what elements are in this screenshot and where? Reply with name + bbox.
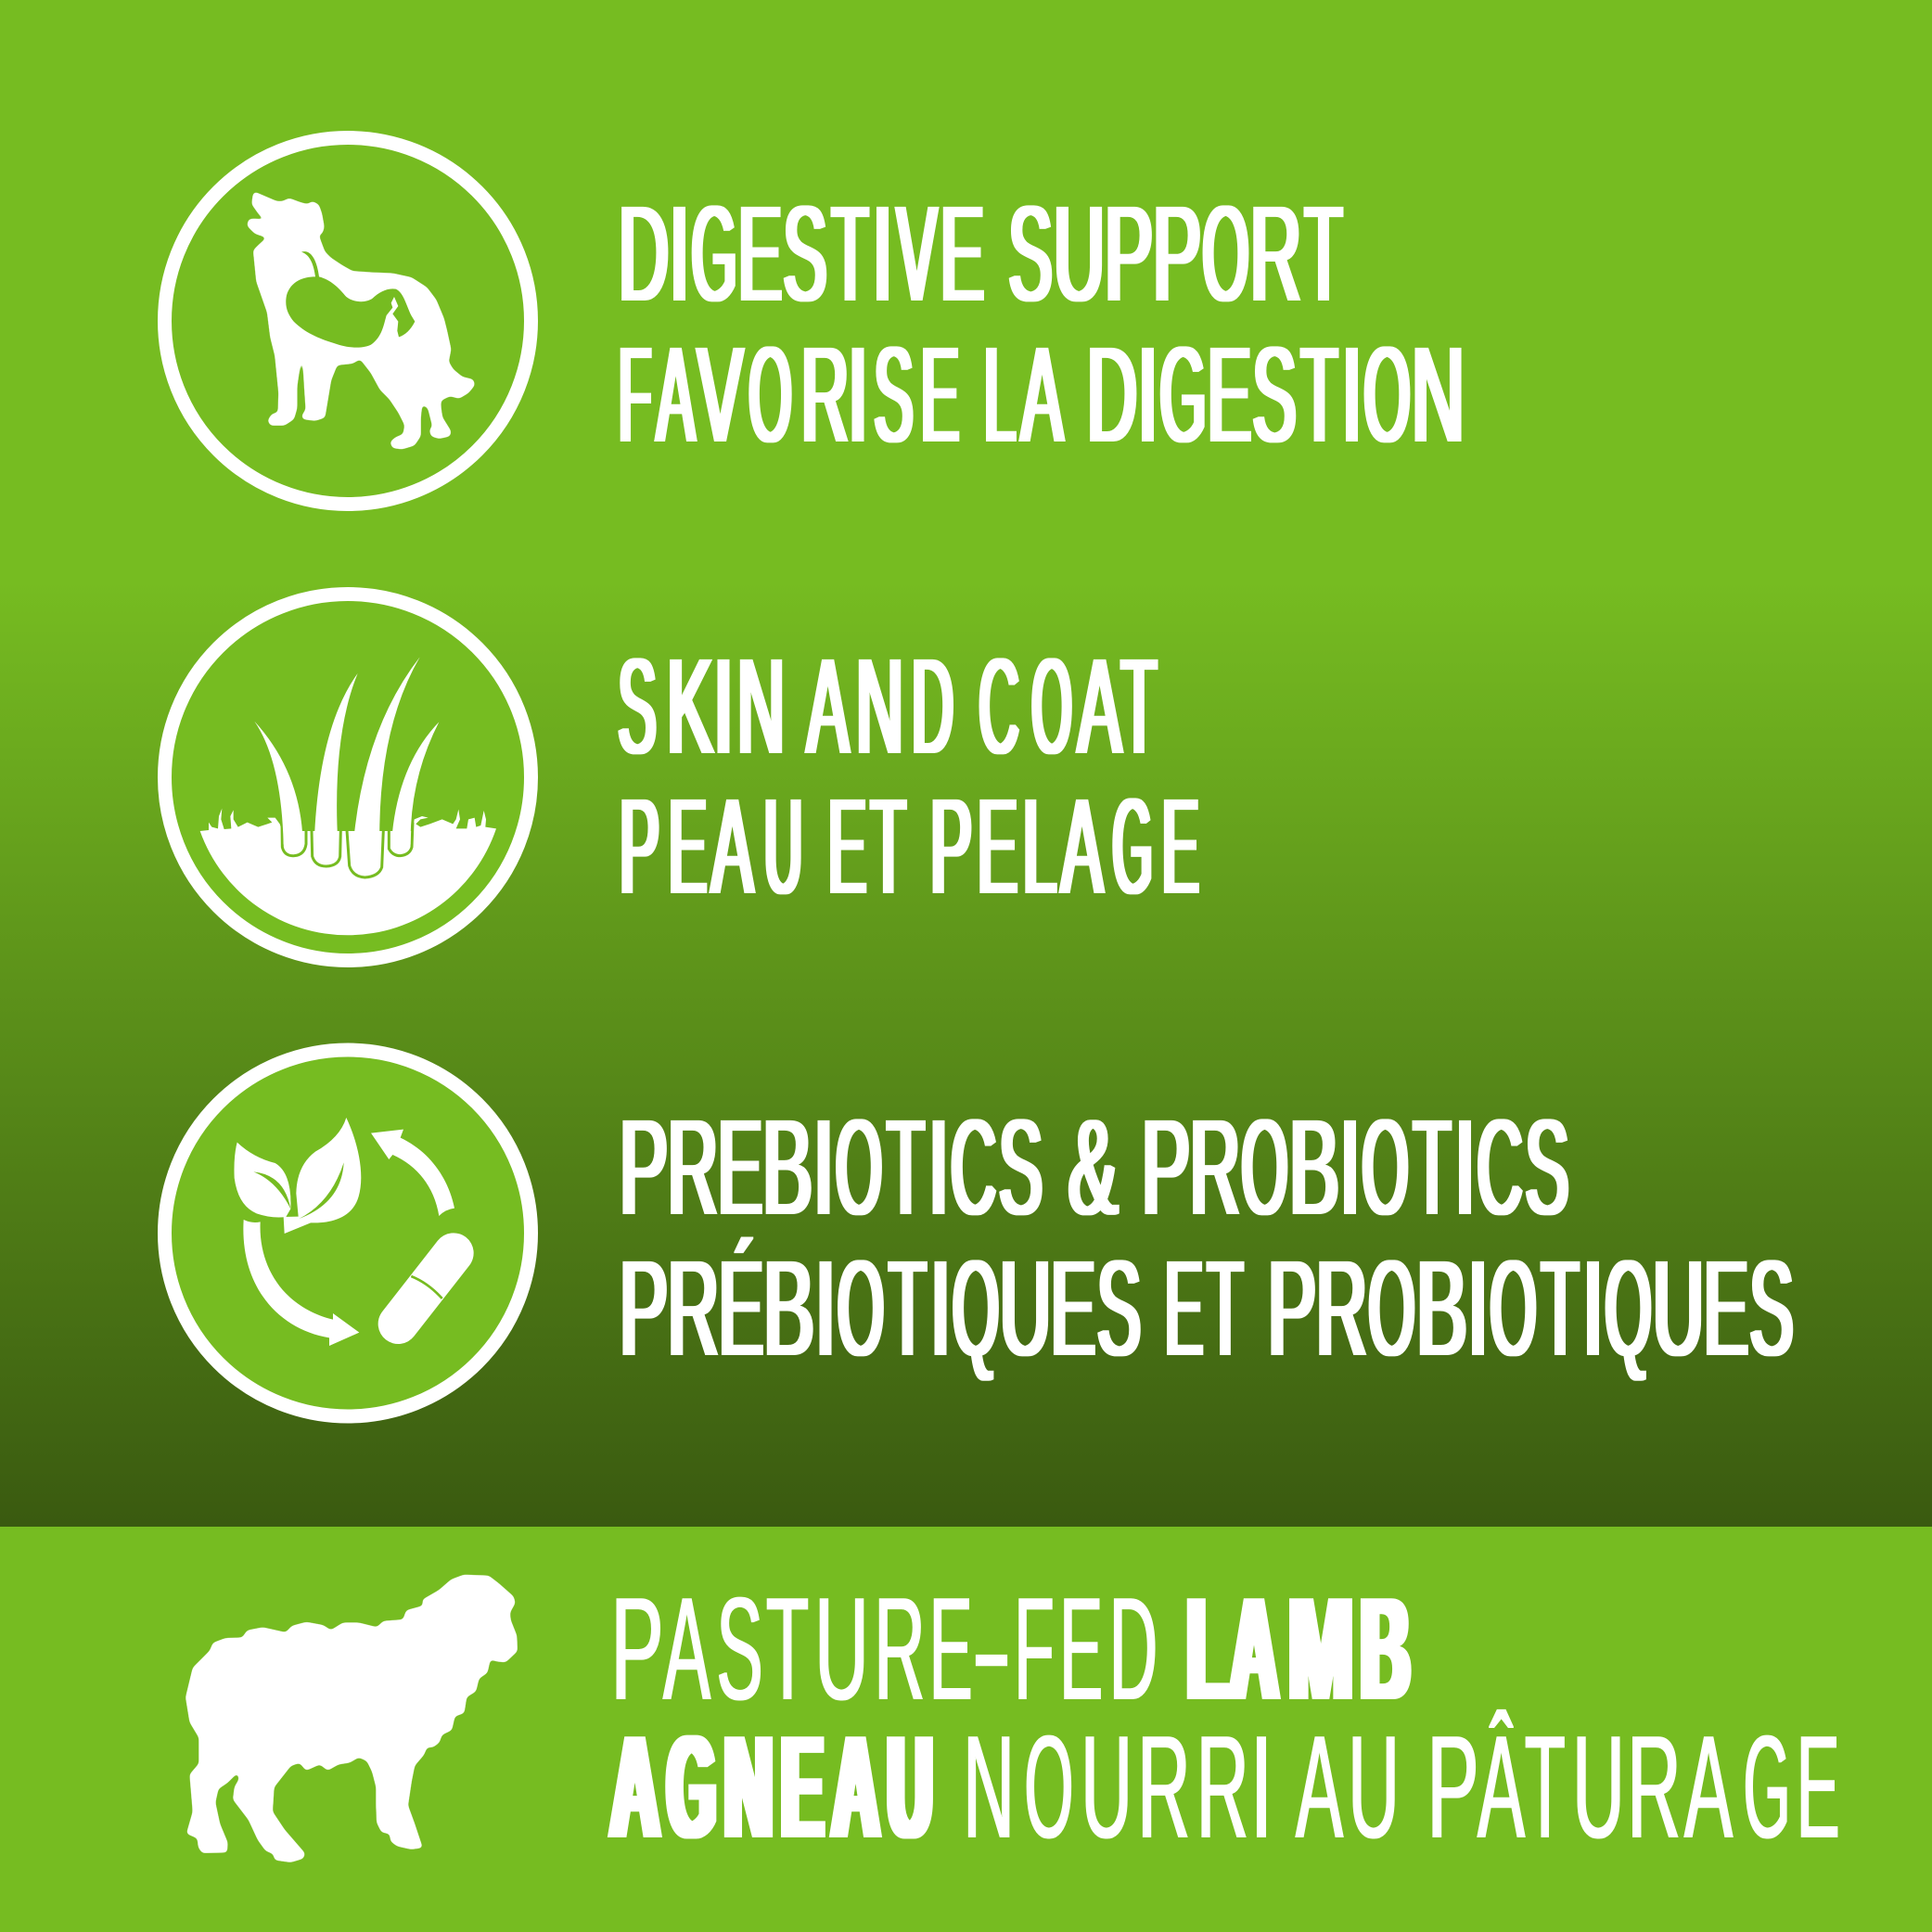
heading: pasture-fed lamb: T xyxy=(1525,1706,1566,1869)
heading: pasture-fed lamb: A xyxy=(1684,1706,1733,1869)
icon: lamb silhouette xyxy=(186,1575,517,1862)
heading: digestive support: A xyxy=(657,319,695,471)
heading: prebiotics and probiotics: O xyxy=(1369,1233,1415,1385)
heading: digestive support: G xyxy=(1159,319,1206,471)
icon: leaves, capsule and cycle arrows in circle xyxy=(165,1050,531,1416)
heading: digestive support: R xyxy=(1250,178,1301,330)
heading: pasture-fed lamb: R xyxy=(1196,1706,1248,1869)
heading: pasture-fed lamb: M xyxy=(1289,1567,1352,1731)
heading: pasture-fed lamb: G xyxy=(1744,1706,1790,1869)
heading: skin and coat: A xyxy=(1078,631,1121,783)
heading: prebiotics and probiotics: E xyxy=(1051,1233,1095,1385)
heading: prebiotics and probiotics: T xyxy=(1542,1233,1579,1385)
panel: bottom lamb band xyxy=(0,1527,1932,1932)
heading: prebiotics and probiotics: S xyxy=(1525,1092,1569,1244)
heading: pasture-fed lamb: A xyxy=(663,1567,710,1731)
heading: pasture-fed lamb: B xyxy=(1361,1567,1410,1731)
heading: prebiotics and probiotics: T xyxy=(1208,1233,1243,1385)
heading: pasture-fed lamb: O xyxy=(1024,1706,1073,1869)
heading: digestive support: I xyxy=(848,319,868,471)
heading: digestive support: I xyxy=(1342,319,1362,471)
heading: prebiotics and probiotics: R xyxy=(668,1092,718,1244)
heading: pasture-fed lamb: - xyxy=(971,1567,1012,1731)
heading: prebiotics and probiotics: T xyxy=(887,1092,924,1244)
heading: digestive support: E xyxy=(940,178,984,330)
heading: digestive support: T xyxy=(1305,178,1342,330)
heading: prebiotics and probiotics: I xyxy=(1468,1233,1488,1385)
heading: digestive support: I xyxy=(670,178,689,330)
heading: skin and coat: O xyxy=(1031,631,1072,783)
hair strands xyxy=(254,657,439,875)
heading: prebiotics and probiotics: I xyxy=(1583,1233,1603,1385)
heading: digestive support: F xyxy=(619,319,651,471)
heading: skin and coat: U xyxy=(764,771,802,923)
heading: skin and coat: A xyxy=(1061,771,1103,923)
heading: pasture-fed lamb: A xyxy=(610,1706,659,1869)
heading: prebiotics and probiotics: B xyxy=(763,1233,814,1385)
heading: pasture-fed lamb: R xyxy=(1627,1706,1681,1869)
heading: skin and coat: D xyxy=(912,631,953,783)
heading: skin and coat: T xyxy=(1121,631,1157,783)
heading: prebiotics and probiotics: S xyxy=(1097,1233,1141,1385)
heading: digestive support: I xyxy=(873,178,892,330)
heading: pasture-fed lamb: A xyxy=(1296,1706,1343,1869)
arrow: lower xyxy=(243,1220,359,1346)
heading: pasture-fed lamb: E xyxy=(781,1706,824,1869)
heading: prebiotics and probiotics: E xyxy=(718,1092,762,1244)
heading: skin and coat: E xyxy=(669,771,707,923)
heading: prebiotics and probiotics: O xyxy=(1362,1092,1408,1244)
heading: digestive support: R xyxy=(801,319,849,471)
heading: digestive support: E xyxy=(1208,319,1251,471)
heading: skin and coat: N xyxy=(856,631,903,783)
heading: digestive support: D xyxy=(619,178,669,330)
heading: prebiotics and probiotics xyxy=(620,1092,1794,1385)
heading: prebiotics and probiotics: U xyxy=(1000,1233,1051,1385)
heading: digestive support: N xyxy=(1412,319,1465,471)
heading: digestive support: O xyxy=(1202,178,1248,330)
heading: pasture-fed lamb: A xyxy=(1230,1567,1278,1731)
stomach and intestine xyxy=(286,251,415,348)
heading: pasture-fed lamb: T xyxy=(766,1567,809,1731)
heading: pasture-fed lamb: R xyxy=(874,1567,926,1731)
icon: skin and hair in circle xyxy=(165,594,531,961)
heading: digestive support: V xyxy=(897,178,937,330)
heading: pasture-fed lamb: G xyxy=(668,1706,716,1869)
heading: digestive support: O xyxy=(749,319,792,471)
heading: digestive support: V xyxy=(697,319,743,471)
arrow: upper xyxy=(371,1130,454,1216)
text: E xyxy=(1797,1706,1839,1869)
icon: dog with digestive tract in circle xyxy=(165,137,531,505)
heading: pasture-fed lamb: U xyxy=(1081,1706,1132,1869)
heading: skin and coat xyxy=(618,631,1198,923)
heading: digestive support: U xyxy=(1054,178,1105,330)
heading: prebiotics and probiotics: R xyxy=(1190,1092,1240,1244)
heading: prebiotics and probiotics: E xyxy=(1704,1233,1748,1385)
heading: pasture-fed lamb: Â xyxy=(1478,1706,1525,1869)
heading: pasture-fed lamb: D xyxy=(1109,1567,1158,1731)
heading: prebiotics and probiotics: R xyxy=(668,1233,719,1385)
heading: pasture-fed lamb: S xyxy=(716,1567,762,1731)
heading: digestive support: T xyxy=(1301,319,1337,471)
heading: pasture-fed lamb: N xyxy=(724,1706,773,1869)
heading: skin and coat: K xyxy=(667,631,713,783)
heading: pasture-fed lamb: E xyxy=(929,1567,972,1731)
leaves xyxy=(234,1118,361,1234)
heading: prebiotics and probiotics: O xyxy=(1241,1092,1287,1244)
heading: pasture-fed lamb: A xyxy=(832,1706,879,1869)
heading: skin and coat: E xyxy=(828,771,866,923)
heading: prebiotics and probiotics: U xyxy=(1653,1233,1704,1385)
heading: prebiotics and probiotics: P xyxy=(1142,1092,1190,1244)
heading: pasture-fed lamb: P xyxy=(1427,1706,1478,1869)
heading: skin and coat: C xyxy=(979,631,1018,783)
heading: prebiotics and probiotics: & xyxy=(1068,1092,1118,1244)
heading: pasture-fed lamb: F xyxy=(1015,1567,1054,1731)
heading: prebiotics and probiotics: I xyxy=(814,1092,833,1244)
heading: prebiotics and probiotics: I xyxy=(1455,1092,1475,1244)
panel: gradient background xyxy=(0,0,1932,1527)
heading: prebiotics and probiotics: I xyxy=(931,1233,950,1385)
dog silhouette xyxy=(248,192,475,449)
heading: pasture-fed lamb: R xyxy=(1137,1706,1190,1869)
heading: digestive support xyxy=(619,178,1465,471)
heading: digestive support: P xyxy=(1105,178,1153,330)
heading: pasture-fed lamb: L xyxy=(1187,1567,1227,1731)
heading: prebiotics and probiotics: Q xyxy=(953,1233,999,1385)
heading: pasture-fed lamb: U xyxy=(1573,1706,1625,1869)
heading: skin and coat: N xyxy=(737,631,785,783)
heading: prebiotics and probiotics: É xyxy=(719,1233,763,1385)
heading: digestive support: S xyxy=(874,319,913,471)
text: S xyxy=(1749,1233,1794,1385)
heading: pasture-fed lamb: U xyxy=(1349,1706,1400,1869)
heading: pasture-fed lamb: U xyxy=(888,1706,932,1869)
heading: prebiotics and probiotics: C xyxy=(1477,1092,1523,1244)
heading: prebiotics and probiotics: C xyxy=(951,1092,996,1244)
heading: prebiotics and probiotics: O xyxy=(836,1092,882,1244)
skin cross-section xyxy=(200,809,496,935)
heading: pasture-fed lamb: N xyxy=(964,1706,1015,1869)
heading: skin and coat: G xyxy=(1113,771,1152,923)
heading: pasture-fed lamb: I xyxy=(1250,1706,1273,1869)
heading: digestive support: A xyxy=(1021,319,1063,471)
heading: prebiotics and probiotics: O xyxy=(1490,1233,1536,1385)
heading: skin and coat: P xyxy=(930,771,972,923)
heading: skin and coat: E xyxy=(978,771,1017,923)
heading: digestive support: D xyxy=(1087,319,1137,471)
heading: digestive support: I xyxy=(1138,319,1158,471)
heading: skin and coat: T xyxy=(871,771,905,923)
heading: digestive support: P xyxy=(1153,178,1201,330)
heading: skin and coat: L xyxy=(1023,771,1056,923)
heading: prebiotics and probiotics: Q xyxy=(1605,1233,1651,1385)
heading: skin and coat: A xyxy=(711,771,753,923)
heading: pasture-fed lamb: P xyxy=(610,1567,664,1731)
heading: prebiotics and probiotics: I xyxy=(1340,1092,1360,1244)
heading: skin and coat: P xyxy=(620,771,659,923)
heading: pasture-fed lamb: U xyxy=(814,1567,868,1731)
heading: pasture-fed lamb xyxy=(610,1567,1839,1869)
heading: prebiotics and probiotics: I xyxy=(816,1233,835,1385)
heading: prebiotics and probiotics: P xyxy=(1268,1233,1316,1385)
heading: prebiotics and probiotics: P xyxy=(620,1092,668,1244)
heading: prebiotics and probiotics: S xyxy=(999,1092,1043,1244)
heading: prebiotics and probiotics: T xyxy=(1414,1092,1451,1244)
heading: digestive support: E xyxy=(738,178,782,330)
heading: digestive support: T xyxy=(832,178,868,330)
heading: skin and coat: I xyxy=(714,631,733,783)
heading: digestive support: L xyxy=(984,319,1016,471)
heading: prebiotics and probiotics: O xyxy=(838,1233,884,1385)
heading: digestive support: O xyxy=(1363,319,1410,471)
text: E xyxy=(1162,771,1198,923)
heading: pasture-fed lamb: E xyxy=(1059,1567,1103,1731)
heading: prebiotics and probiotics: E xyxy=(1165,1233,1203,1385)
heading: digestive support: S xyxy=(1252,319,1297,471)
heading: digestive support: S xyxy=(1009,178,1052,330)
heading: skin and coat: A xyxy=(807,631,849,783)
heading: digestive support: E xyxy=(921,319,959,471)
heading: digestive support: S xyxy=(783,178,827,330)
heading: prebiotics and probiotics: T xyxy=(889,1233,926,1385)
heading: skin and coat: S xyxy=(618,631,657,783)
heading: prebiotics and probiotics: B xyxy=(762,1092,812,1244)
heading: prebiotics and probiotics: B xyxy=(1416,1233,1467,1385)
capsule xyxy=(398,1253,454,1324)
heading: prebiotics and probiotics: B xyxy=(1289,1092,1339,1244)
heading: prebiotics and probiotics: P xyxy=(620,1233,668,1385)
heading: digestive support: G xyxy=(692,178,736,330)
heading: prebiotics and probiotics: R xyxy=(1316,1233,1367,1385)
heading: prebiotics and probiotics: I xyxy=(929,1092,948,1244)
follicle outlines xyxy=(282,823,413,877)
